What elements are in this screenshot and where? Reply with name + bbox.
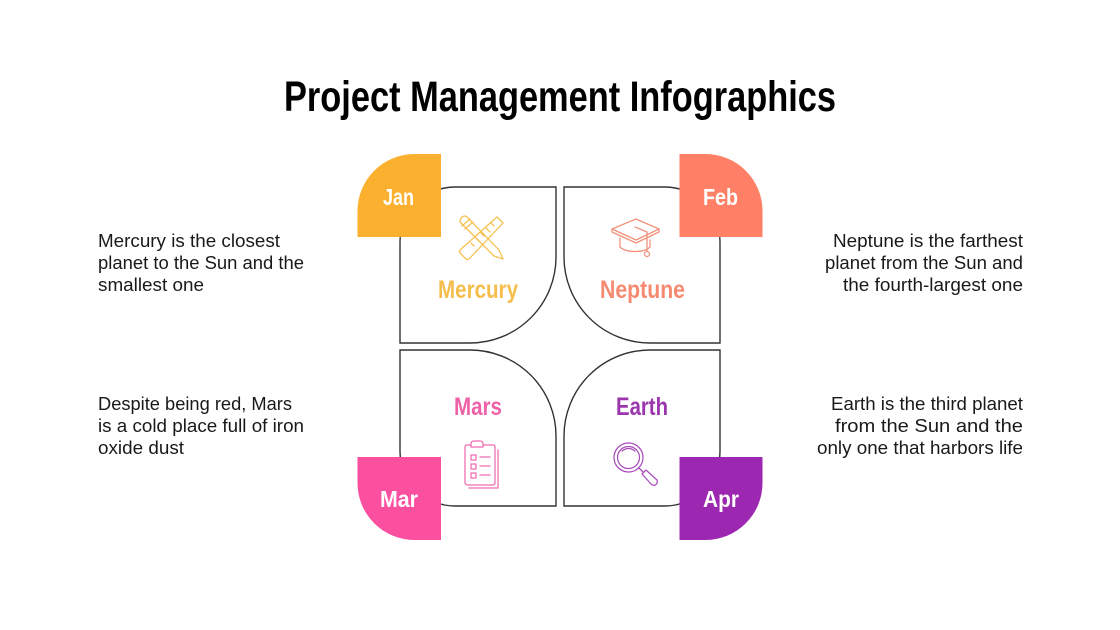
text block: Earth: only one that harbors life — [817, 438, 1023, 458]
text block: Mars — [98, 394, 304, 458]
card outline: Mercury — [400, 187, 556, 343]
text block: Mars: is a cold place full of iron — [98, 416, 304, 436]
icon: magnifying glass — [614, 443, 657, 485]
text block: Earth: from the Sun and the — [835, 416, 1023, 436]
text block: Mercury: smallest one — [98, 275, 204, 295]
icon: checklist clipboard — [465, 441, 498, 488]
icon: pencil and ruler — [460, 216, 503, 260]
card outline: Earth — [564, 350, 720, 506]
text block: Earth: Earth is the third planet — [831, 394, 1023, 414]
tab: Apr: Apr — [703, 486, 739, 512]
tab: Mars: Mar — [380, 486, 418, 512]
panel: Mercury — [358, 154, 556, 343]
label: Neptune: Neptune — [600, 276, 685, 304]
text block: Mercury: Mercury is the closest — [98, 231, 280, 251]
card outline: Neptune — [564, 187, 720, 343]
text block: Neptune: Neptune is the farthest — [833, 231, 1023, 251]
card outline: Mars — [400, 350, 556, 506]
text block: Neptune: planet from the Sun and — [825, 253, 1023, 273]
tab: Apr — [680, 457, 762, 540]
tab: Feb — [680, 154, 762, 237]
text block: Mars: oxide dust — [98, 438, 184, 458]
tab: Mars — [358, 457, 441, 540]
tab: Jan: Jan — [383, 184, 414, 210]
label: Mercury: Mercury — [438, 276, 518, 304]
label: Earth: Earth — [616, 393, 668, 421]
icon: graduation cap — [612, 219, 659, 256]
tab: Feb: Feb — [703, 184, 738, 210]
panel: Neptune — [564, 154, 762, 343]
panel: Earth — [564, 350, 762, 540]
text block: Neptune: the fourth-largest one — [843, 275, 1023, 295]
text block: Mercury — [98, 231, 304, 295]
label: Mars: Mars — [454, 393, 502, 421]
text block: Earth — [817, 394, 1023, 458]
tab: Jan — [358, 154, 441, 237]
text block: Neptune — [825, 231, 1023, 295]
panel: Mars — [358, 350, 556, 540]
text block: Mars: Despite being red, Mars — [98, 394, 292, 414]
title: Project Management Infographics — [284, 73, 836, 121]
text block: Mercury: planet to the Sun and the — [98, 253, 304, 273]
